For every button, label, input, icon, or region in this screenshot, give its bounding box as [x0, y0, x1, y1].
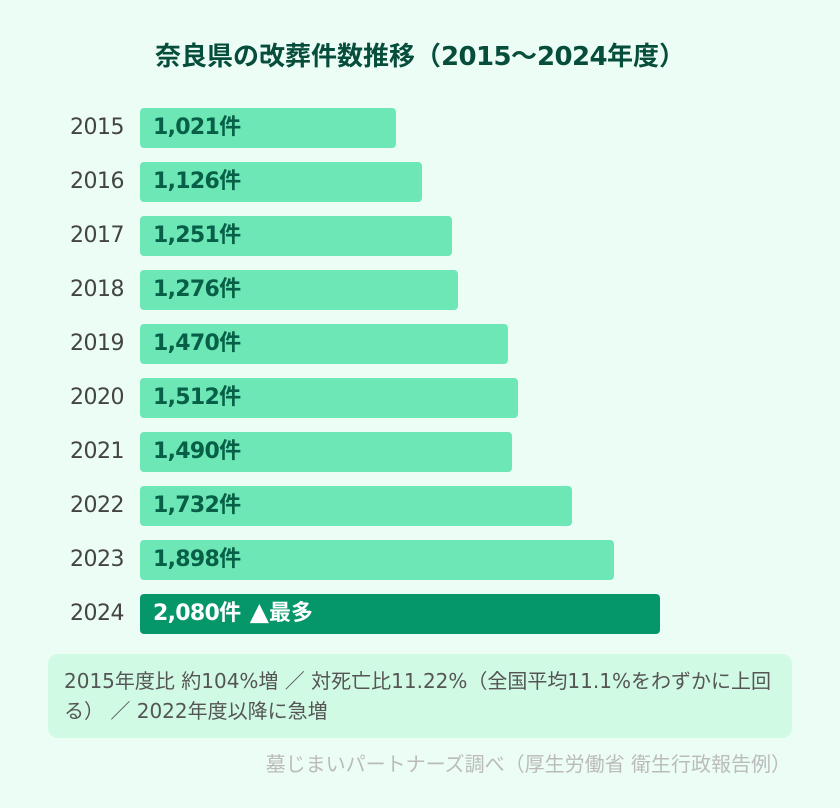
title: 奈良県の改葬件数推移（2015～2024年度） — [155, 42, 685, 72]
row: 2018 — [70, 270, 458, 310]
row: 2019: 1,470件 — [153, 331, 241, 356]
callout note: 2015年度比 約104%増 ／ 対死亡比11.22%（全国平均11.1%をわずかに上回る） ／ 2022年度以降に急増 — [64, 669, 771, 723]
row: 2023 — [70, 540, 614, 580]
row: 2017: 2017 — [70, 223, 124, 248]
row: 2016 — [70, 162, 422, 202]
row: 2020: 2020 — [70, 385, 124, 410]
row: 2015: 1,021件 — [153, 115, 241, 140]
row: 2020 — [70, 378, 518, 418]
row: 2017 — [70, 216, 452, 256]
row: 2019: 2019 — [70, 331, 124, 356]
row: 2018: 2018 — [70, 277, 124, 302]
row: 2023: 1,898件 — [153, 547, 241, 572]
row: 2016: 2016 — [70, 169, 124, 194]
source: 墓じまいパートナーズ調べ（厚生労働省 衛生行政報告例） — [266, 752, 791, 776]
row: 2023: 2023 — [70, 547, 124, 572]
row: 2016: 1,126件 — [153, 169, 241, 194]
row: 2017: 1,251件 — [153, 223, 241, 248]
row: 2015 — [70, 108, 396, 148]
row: 2021: 1,490件 — [153, 439, 241, 464]
row: 2024 highlighted: 2,080件 ▲最多 — [153, 597, 313, 626]
row: 2021 — [70, 432, 512, 472]
row: 2020: 1,512件 — [153, 385, 241, 410]
row: 2022: 1,732件 — [153, 493, 241, 518]
row: 2015: 2015 — [70, 115, 124, 140]
row: 2024 highlighted: 2024 — [70, 601, 124, 626]
row: 2019 — [70, 324, 508, 364]
row: 2022: 2022 — [70, 493, 124, 518]
row: 2022 — [70, 486, 572, 526]
row: 2018: 1,276件 — [153, 277, 241, 302]
callout note — [48, 654, 792, 738]
row: 2024 highlighted — [70, 594, 660, 634]
row: 2021: 2021 — [70, 439, 124, 464]
